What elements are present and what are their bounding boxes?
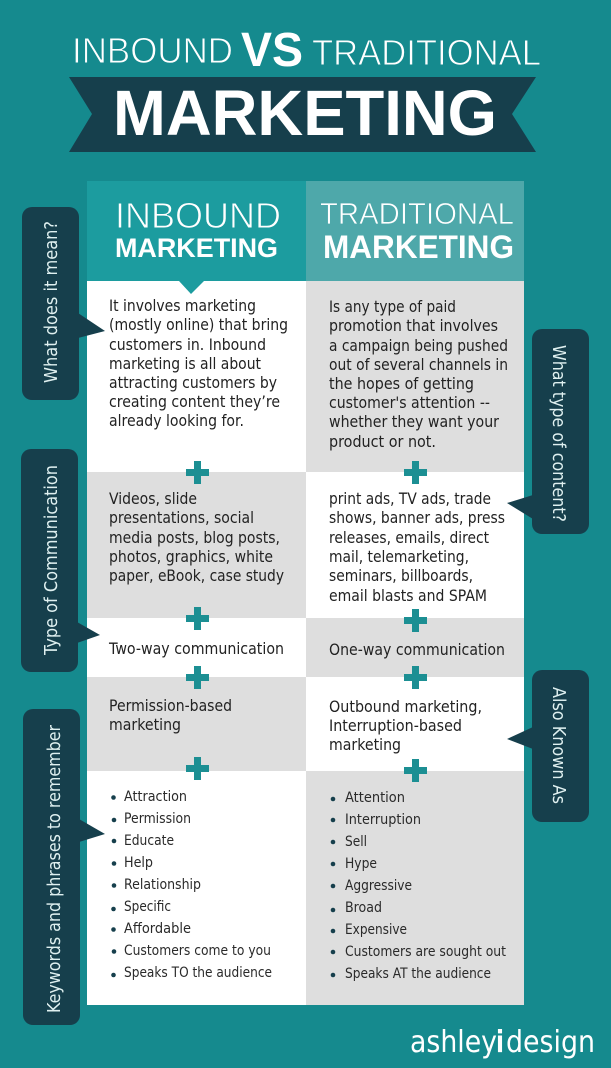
title word: marketing: MARKETING bbox=[113, 77, 497, 149]
traditional row: keywords: Broad bbox=[345, 900, 382, 916]
traditional row: also known as: Outbound marketing, bbox=[329, 697, 482, 716]
callout: type of communication: Type of Communication bbox=[41, 465, 62, 656]
inbound row: keywords: Help bbox=[124, 855, 153, 871]
inbound row: content types: paper, eBook, case study bbox=[109, 566, 284, 585]
callout: what does it mean bbox=[22, 207, 105, 400]
traditional row: keywords: Sell bbox=[345, 834, 367, 850]
traditional row: content types: mail, telemarketing, bbox=[329, 547, 469, 566]
title line: inbound vs traditional: TRADITIONAL bbox=[312, 32, 541, 73]
callout: type of communication bbox=[21, 449, 100, 672]
inbound row: definition: It involves marketing bbox=[109, 296, 256, 315]
panel: inbound column bbox=[87, 181, 306, 1005]
traditional row: keywords: Hype bbox=[345, 856, 377, 872]
traditional row: definition: promotion that involves bbox=[329, 316, 498, 335]
inbound row: content types: media posts, blog posts, bbox=[109, 528, 280, 547]
inbound row: communication bbox=[87, 618, 306, 677]
traditional row: keywords bbox=[306, 771, 524, 1005]
traditional row: definition: Is any type of paid bbox=[329, 297, 456, 316]
inbound row: communication: Two-way communication bbox=[108, 639, 284, 658]
traditional column heading bbox=[306, 181, 524, 281]
icons: plus connectors bbox=[186, 461, 427, 782]
inbound row: keywords: Customers come to you bbox=[124, 943, 271, 959]
inbound row: also known as: Permission-based bbox=[109, 696, 232, 715]
title line: inbound vs traditional: VS bbox=[241, 24, 303, 77]
inbound row: definition: attracting customers by bbox=[109, 373, 277, 392]
logo: ashleyidesign bbox=[410, 1025, 595, 1060]
traditional row: keywords: Expensive bbox=[345, 922, 407, 938]
traditional row: also known as bbox=[306, 677, 524, 771]
callout: what type of content bbox=[507, 329, 589, 534]
inbound row: keywords: Specific bbox=[124, 899, 171, 915]
traditional row: definition: whether they want your bbox=[329, 412, 499, 431]
inbound column heading: INBOUND bbox=[115, 195, 281, 236]
traditional column heading: MARKETING bbox=[323, 229, 514, 265]
callout: keywords and phrases bbox=[23, 709, 105, 1025]
traditional row: definition: customer's attention -- bbox=[329, 393, 490, 412]
inbound row: keywords: Permission bbox=[124, 811, 191, 827]
inbound row: also known as bbox=[87, 677, 306, 771]
inbound row: keywords: Educate bbox=[124, 833, 174, 849]
traditional row: also known as: Interruption-based bbox=[329, 716, 462, 735]
traditional row: content types: print ads, TV ads, trade bbox=[329, 489, 491, 508]
title bbox=[69, 24, 541, 152]
traditional row: definition: product or not. bbox=[329, 432, 436, 451]
inbound column heading bbox=[87, 181, 306, 281]
traditional row: also known as: marketing bbox=[329, 735, 401, 754]
traditional column heading: TRADITIONAL bbox=[320, 196, 514, 231]
logo: ashleyidesign: i bbox=[496, 1025, 504, 1060]
inbound row: keywords: Attraction bbox=[124, 789, 187, 805]
callout: what does it mean: What does it mean? bbox=[41, 221, 62, 383]
traditional row: content types: email blasts and SPAM bbox=[329, 586, 487, 605]
inbound row: keywords: Speaks TO the audience bbox=[124, 965, 272, 981]
callout: keywords and phrases: Keywords and phrases to remember bbox=[44, 724, 65, 1013]
inbound row: also known as: marketing bbox=[109, 715, 181, 734]
inbound row: content types: photos, graphics, white bbox=[109, 547, 273, 566]
inbound row: content types: Videos, slide bbox=[109, 489, 197, 508]
traditional row: content types: shows, banner ads, press bbox=[329, 508, 505, 527]
title line: inbound vs traditional: INBOUND bbox=[72, 30, 233, 71]
inbound row: definition: marketing is all about bbox=[109, 354, 261, 373]
traditional row: keywords: Aggressive bbox=[345, 878, 412, 894]
traditional row: definition bbox=[306, 281, 524, 472]
traditional row: keywords: Attention bbox=[345, 790, 405, 806]
inbound column heading: MARKETING bbox=[115, 233, 278, 263]
panel: traditional column bbox=[306, 181, 524, 1005]
inbound row: definition: already looking for. bbox=[109, 411, 244, 430]
traditional row: keywords: Customers are sought out bbox=[345, 944, 506, 960]
callout: also known as: Also Known As bbox=[548, 687, 569, 804]
traditional row: keywords: Speaks AT the audience bbox=[345, 966, 491, 982]
traditional row: keywords: Interruption bbox=[345, 812, 421, 828]
traditional row: content types: releases, emails, direct bbox=[329, 528, 489, 547]
inbound row: definition: (mostly online) that bring bbox=[109, 315, 288, 334]
traditional row: communication bbox=[306, 618, 524, 677]
traditional row: definition: out of several channels in bbox=[329, 355, 508, 374]
callout: what type of content: What type of content? bbox=[548, 345, 569, 522]
inbound row: content types: presentations, social bbox=[109, 508, 254, 527]
title line: inbound vs traditional bbox=[72, 24, 541, 77]
logo: ashleyidesign: design bbox=[506, 1025, 595, 1060]
traditional row: content types bbox=[306, 472, 524, 618]
inbound row: definition: customers in. Inbound bbox=[109, 335, 266, 354]
inbound row: keywords: Affordable bbox=[124, 921, 191, 937]
traditional row: definition: a campaign being pushed bbox=[329, 336, 508, 355]
title ribbon bbox=[69, 77, 536, 152]
logo: ashleyidesign: ashley bbox=[410, 1025, 497, 1060]
inbound row: content types bbox=[87, 472, 306, 618]
traditional row: content types: seminars, billboards, bbox=[329, 566, 473, 585]
inbound row: keywords: Relationship bbox=[124, 877, 201, 893]
inbound row: keywords bbox=[87, 771, 306, 1005]
traditional row: definition: the hopes of getting bbox=[329, 374, 474, 393]
callout: also known as bbox=[507, 670, 589, 822]
traditional row: communication: One-way communication bbox=[329, 640, 505, 659]
inbound row: definition bbox=[87, 281, 306, 472]
inbound row: definition: creating content they’re bbox=[109, 392, 280, 411]
